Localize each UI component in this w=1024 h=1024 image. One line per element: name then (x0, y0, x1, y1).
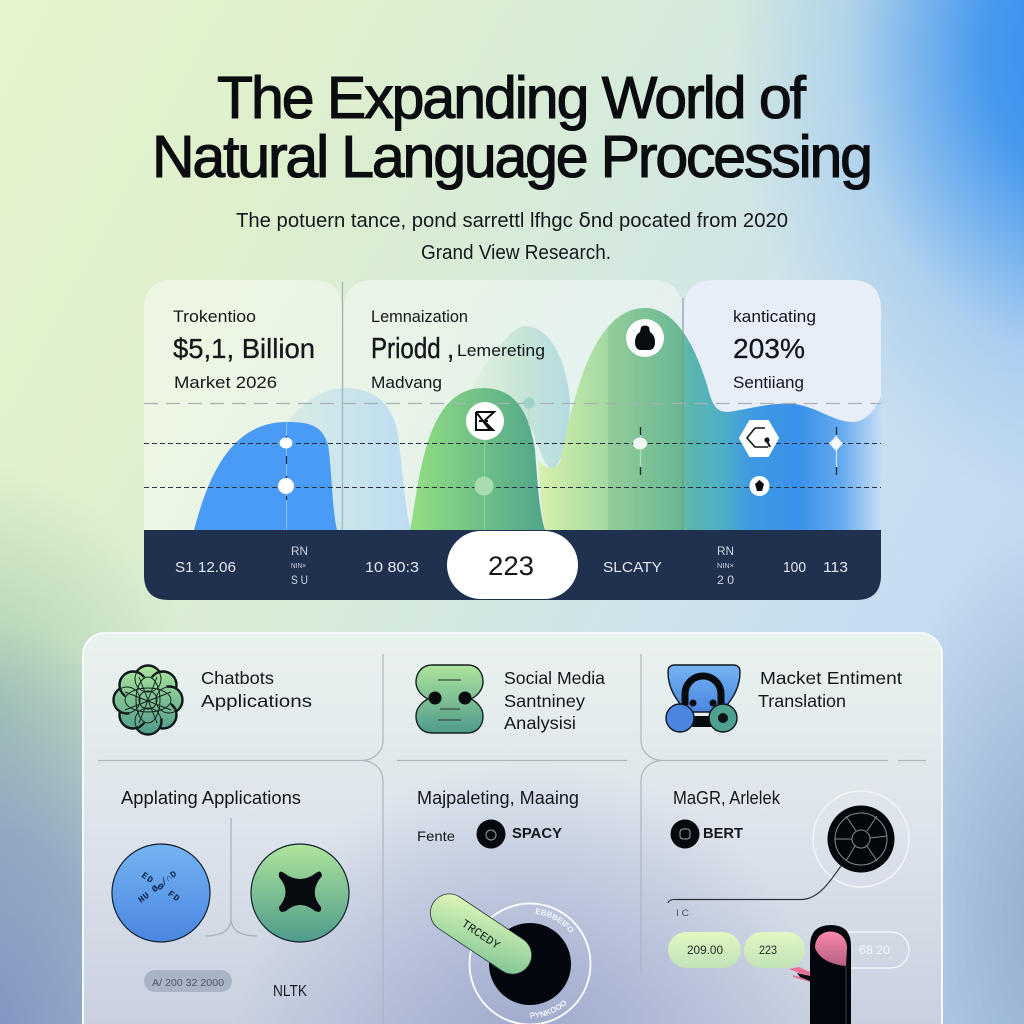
value pill: 209.00 (668, 932, 741, 968)
dark data bar: 100 (783, 559, 806, 576)
data pill (144, 970, 232, 992)
grid lines (144, 282, 881, 530)
tile text: sentiment: kanticating (733, 308, 816, 326)
value pill: 209.00: 209.00 (687, 943, 723, 957)
data pill: A/ 200 32 2000 (152, 978, 224, 989)
tile text: lemmatization: Priodd , (371, 333, 454, 365)
dial with pill: PYNKOOO (530, 1000, 566, 1018)
value pill: 223: 223 (759, 943, 777, 957)
tile text: sentiment (733, 308, 816, 392)
dark data bar: NIN× (291, 563, 306, 570)
dark data bar: S U (291, 573, 308, 587)
tile text: lemmatization (371, 308, 545, 392)
tile text: tokenization: $5,1, Billion (173, 333, 315, 364)
section: BERT: MaGR, Arlelek (673, 788, 781, 808)
dial with pill (430, 894, 592, 1024)
panel dividers (98, 654, 926, 1024)
icon: hexagon marker (740, 421, 778, 456)
tile text: tokenization: Market 2026 (174, 373, 277, 392)
dark data bar: 2 0 (717, 573, 734, 587)
text: application labels: Translation (758, 691, 846, 711)
highlight pill: 223 (447, 531, 578, 599)
chart: blue hill (194, 422, 337, 530)
icon: blue circle: HU Ø /∩D (137, 869, 179, 906)
section: spaCy: Majpaleting, Maaing (417, 788, 579, 808)
label: IC: I C (676, 908, 690, 918)
wheel icon with connector (668, 791, 909, 903)
icon: bottle marker (626, 319, 664, 357)
section: NLTK applications (112, 788, 349, 1000)
icon: blue circle (112, 844, 210, 942)
section: spaCy: Fente (417, 828, 455, 844)
icon: star marker (750, 476, 770, 496)
chart markers (278, 398, 843, 496)
chart: pale teal hill (465, 326, 570, 468)
badge: BERT: BERT (703, 826, 743, 842)
tile text: lemmatization: Madvang (371, 373, 442, 392)
icon: green star circle (251, 844, 349, 942)
title: The Expanding World of (217, 65, 807, 131)
badge: spaCy: SPACY (512, 826, 562, 842)
dark data bar: RN (291, 544, 308, 558)
icon: pointer finger (789, 925, 851, 1024)
icon: chatbot network (114, 666, 182, 734)
chart: green hill (410, 388, 545, 530)
panel: market chart (144, 280, 881, 600)
dark data bar: RN (717, 544, 734, 558)
dark data bar: 10 80:3 (365, 559, 419, 576)
icon: document marker (466, 402, 504, 440)
icon: blue circle: ED Ø FD (139, 871, 182, 904)
value pill: 223 (744, 932, 805, 968)
panel: applications and tools (82, 632, 943, 1024)
dark data bar: 113 (823, 559, 848, 576)
highlight pill: 223: 223 (488, 551, 534, 581)
icon: market headset (666, 665, 740, 732)
label: NLTK: NLTK (273, 983, 307, 1000)
subtitle: The potuern tance, pond sarrettl lfhgc ẟnd pocated from 2020 (236, 210, 788, 232)
dark data bar (144, 530, 881, 600)
tile text: lemmatization: Lemnaization (371, 308, 468, 326)
value pill: outlined: 68 20 (859, 943, 890, 957)
text: application labels: Social Media (504, 668, 605, 688)
text: application labels: Macket Entiment (760, 668, 902, 688)
text: application labels: Santniney (504, 691, 585, 711)
tile text: lemmatization: Lemereting (457, 341, 545, 360)
text: application labels (201, 668, 902, 733)
tile text: tokenization: Trokentioo (173, 308, 256, 326)
dark data bar: SLCATY (603, 559, 662, 576)
title (152, 65, 873, 190)
value pill: outlined (820, 932, 909, 968)
subtitle: Grand View Research. (421, 242, 611, 264)
section: spaCy (417, 788, 592, 1024)
chart: light blue hill (286, 388, 411, 530)
text: application labels: Chatbots (201, 668, 274, 688)
icon: social media face (416, 665, 483, 733)
chart: large green to blue area (538, 308, 881, 530)
tile text: sentiment: 203% (733, 333, 805, 364)
tile text: sentiment: Sentiiang (733, 373, 804, 392)
text: application labels: Applications (201, 691, 312, 711)
title: Natural Language Processing (152, 124, 873, 190)
text: application labels: Analysisi (504, 713, 576, 733)
badge: spaCy (476, 820, 562, 848)
tile text: tokenization (173, 308, 315, 392)
dark data bar: NIN× (717, 563, 734, 570)
section: BERT (668, 788, 909, 1024)
dial with pill: TRCEDY (459, 917, 502, 953)
section: NLTK applications: Applating Applications (121, 788, 301, 808)
subtitle (236, 210, 788, 264)
badge: BERT (670, 820, 743, 848)
dark data bar: S1 12.06 (175, 559, 236, 576)
dial with pill: EBBBEIFO (536, 908, 574, 932)
tile backgrounds (144, 280, 881, 530)
